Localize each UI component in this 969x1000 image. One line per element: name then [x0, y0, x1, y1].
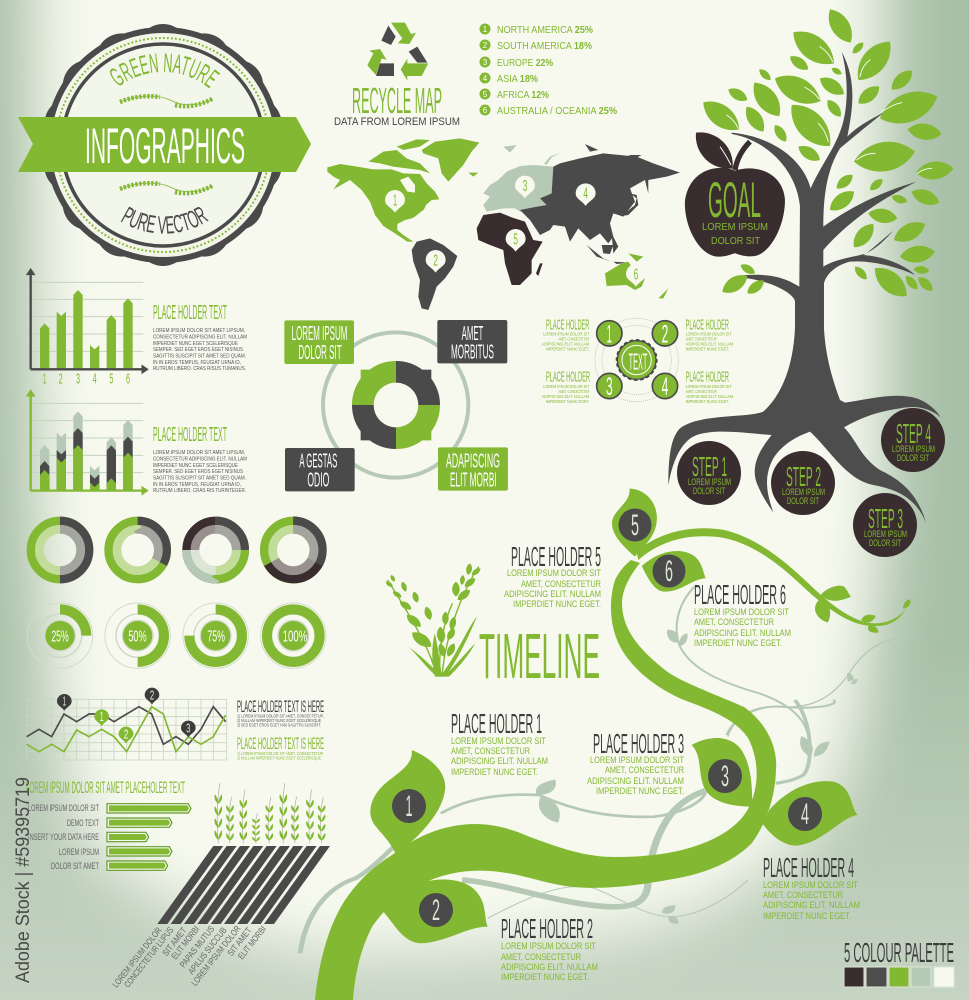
text block: place holder 2: LOREM IPSUM DOLOR SIT [501, 941, 596, 952]
text block: place holder 1: LOREM IPSUM DOLOR SIT [451, 736, 546, 747]
step 2: LOREM IPSUM [782, 487, 825, 497]
bar chart 1 [23, 270, 147, 388]
ornament: lower wheat [120, 183, 213, 193]
text: PLACE HOLDER TEXT IS HERE [237, 697, 324, 716]
progress ring row [27, 603, 326, 668]
text bottom right: LOREM IPSUM DOLOR SIT [686, 384, 732, 390]
marker dark 2: 2 [150, 687, 154, 702]
legend: regions: 3 [483, 58, 488, 67]
marker green 2: 2 [124, 726, 128, 741]
text: pure vector: PURE VECTOR [120, 206, 209, 234]
progress 25% [27, 603, 93, 668]
legend: regions: 1 [483, 25, 488, 34]
text block: bar chart 2 [153, 424, 247, 494]
marker dark 1 [57, 694, 72, 711]
label: adapiscing: ADAPISCING [446, 451, 500, 473]
leaf veins [727, 47, 932, 173]
wheat plants [215, 783, 325, 843]
bar 5 [107, 861, 168, 870]
legend: regions: EUROPE 22% [497, 58, 553, 69]
bar chart 1: 6 [126, 371, 130, 388]
text block: bar chart 1: SEMPER. SED EGET EROS EGET NISINUS [153, 347, 243, 353]
diagonal labels: LOREM IPSUM DOLOR [189, 923, 243, 988]
step 1: LOREM IPSUM [688, 477, 731, 487]
step 4: DOLOR SIT [897, 453, 929, 463]
text block: bar chart 1 [153, 302, 247, 372]
diagonal labels: PAPAS MUTUS [178, 924, 216, 970]
text top left: LOREM IPSUM DOLOR SIT [543, 332, 589, 338]
text: PLACE HOLDER [686, 370, 729, 386]
bar 4 [107, 847, 172, 856]
tree leaves [703, 9, 953, 296]
text block: bar chart 2: LOREM IPSUM DOLOR SIT AMET LIPSUM, [153, 450, 245, 456]
text block: place holder 5: ADIPISCING ELIT. NULLAM [504, 589, 601, 600]
step 2 [771, 451, 835, 515]
node 3 [597, 373, 622, 401]
pin 4: 4 [583, 186, 588, 203]
vine tendril with leaves [637, 528, 911, 633]
text bottom right [686, 370, 733, 405]
text block: line chart green: 1) LOREM IPSUM DOLOR SIT AMET, CONSECTETUR. [237, 751, 324, 756]
text top right: LOREM IPSUM DOLOR SIT [686, 332, 732, 338]
diagonal labels [110, 923, 268, 990]
donut 1 [31, 521, 89, 579]
pin 5: 5 [513, 231, 518, 248]
legend: regions: 6 [483, 106, 488, 115]
bar 3 [107, 832, 149, 842]
text bottom left: AMET, CONSECTETUR [558, 389, 590, 395]
text block: place holder 6 [694, 579, 791, 649]
text block: line chart green: 2) NULLAM IMPERDIET NUNC EGET SCELERISQUE. [237, 756, 322, 760]
step 3: LOREM IPSUM [864, 529, 907, 539]
watermark id: Adobe Stock | #59395719 [13, 777, 34, 983]
region: oceania [605, 253, 668, 298]
text bottom left: LOREM IPSUM DOLOR SIT [543, 384, 589, 390]
node 1 [597, 321, 622, 348]
diagonal labels: SIT AMET [160, 925, 189, 958]
step 3: STEP 3 [868, 503, 903, 534]
leaf 6 [642, 551, 706, 592]
text: PLACE HOLDER 1 [451, 708, 542, 739]
text block: place holder 5: IMPERDIET NUNC EGET. [513, 599, 601, 610]
label: amet morbitus: MORBITUS [451, 341, 494, 363]
step 1 [677, 441, 741, 505]
text top right: AMET, CONSECTETUR [686, 337, 717, 343]
numbered circle diagram [542, 317, 733, 405]
text block: place holder 1 [451, 708, 548, 778]
text: RECYCLE MAP [352, 80, 442, 121]
center ring diagram [284, 320, 508, 492]
pale vines upper [667, 587, 917, 737]
label: adapiscing: ELIT MORBI [450, 470, 497, 492]
bar chart 1: 3 [76, 371, 80, 388]
donut 4 [264, 521, 322, 579]
step 1: DOLOR SIT [693, 486, 725, 496]
text block: place holder 3 [587, 728, 684, 797]
marker dark 1: 1 [62, 694, 66, 709]
text block: place holder 4: LOREM IPSUM DOLOR SIT [763, 880, 858, 891]
diagonal wheat chart [110, 783, 330, 990]
progress 25%: 25% [51, 628, 69, 645]
text: PLACE HOLDER 2 [501, 913, 593, 944]
text bottom left: ADIPISCING ELIT. NULLAM [542, 394, 589, 400]
progress 75%: 75% [207, 628, 225, 645]
leaf 2 [383, 880, 488, 943]
label: adapiscing [438, 447, 508, 492]
text: PLACE HOLDER TEXT IS HERE [237, 734, 324, 753]
text block: line chart dark: 1) LOREM IPSUM DOLOR SIT AMET, CONSECTETUR. [237, 714, 324, 718]
heading: green nature: GREEN NATURE [110, 53, 220, 88]
bar 1 [107, 804, 191, 813]
badge: infographics seal [18, 24, 311, 266]
text block: place holder 6: LOREM IPSUM DOLOR SIT [694, 607, 789, 618]
text block: place holder 2: ADIPISCING ELIT. NULLAM [501, 962, 598, 973]
node 2: 2 [662, 321, 668, 348]
colour palette [844, 937, 954, 987]
text bottom right: IMPERDIET NUNC EGET. [686, 399, 729, 405]
text block: bar chart 1: LOREM IPSUM DOLOR SIT AMET LIPSUM, [153, 328, 245, 334]
text block: bar chart 1: RUTRUM LIBERO. CRAS RISUS TUMANUS. [153, 366, 246, 372]
region: europe [483, 145, 561, 212]
tree: goal [685, 9, 953, 333]
text block: bar chart 1: SAGITTIS SUSCIPIT SIT AMET SED QUAM. [153, 354, 246, 360]
text block: bar chart 2: SAGITTIS SUSCIPIT SIT AMET SED QUAM. [153, 476, 246, 482]
apple text: goal [702, 172, 768, 247]
legend: regions: AUSTRALIA / OCEANIA 25% [497, 106, 617, 117]
legend: regions: ASIA 18% [497, 74, 538, 85]
node 3: 3 [606, 374, 613, 401]
bar chart 1: 5 [109, 371, 113, 388]
text top right: IMPERDIET NUNC EGET. [686, 347, 729, 353]
legend: regions: 4 [483, 74, 488, 83]
progress 50% [105, 603, 170, 668]
label: lorem ipsum [284, 320, 354, 364]
ribbon [18, 117, 311, 172]
legend: regions: NORTH AMERICA 25% [497, 25, 593, 36]
region: asia [520, 144, 680, 264]
text top left: AMET, CONSECTETUR [558, 337, 590, 343]
badge: infographics seal: INFOGRAPHICS [85, 118, 245, 174]
region: south america [412, 238, 457, 310]
apple text: goal: DOLOR SIT [711, 235, 761, 247]
gear donut [352, 361, 440, 449]
diagonal labels: SIT AMET [225, 925, 254, 958]
text block: place holder 6: AMET, CONSECTETUR [694, 617, 774, 628]
text block: place holder 3: IMPERDIET NUNC EGET. [596, 786, 684, 797]
bar 2 [107, 818, 172, 827]
text block: place holder 2: AMET, CONSECTETUR [501, 952, 581, 963]
text bottom left [542, 370, 590, 405]
bar chart 1: 2 [59, 371, 63, 388]
text block: place holder 4: ADIPISCING ELIT. NULLAM [763, 900, 860, 911]
text: PLACE HOLDER TEXT [153, 302, 227, 324]
text block: place holder 2 [501, 913, 598, 983]
text: TIMELINE [479, 620, 600, 692]
marker green 1 [94, 709, 109, 726]
text block: line chart dark: 2) NULLAM IMPERDIET NUNC EGET SCELERISQUE. [237, 718, 322, 723]
leaf 3 [692, 738, 752, 807]
diagonal labels: LOREM IPSUM DOLOR [110, 925, 164, 990]
horizontal bar chart: DOLOR SIT AMET [51, 861, 99, 871]
node 4 [652, 373, 678, 401]
text block: place holder 1: AMET, CONSECTETUR [451, 746, 530, 757]
node 4: 4 [662, 374, 668, 401]
apple [685, 132, 785, 257]
pin 6: 6 [634, 266, 638, 283]
line chart [27, 687, 227, 760]
text block: line chart dark: 3) SED EGET EROS EGET NISI SAGITTIS SUSCIPIT. [237, 722, 321, 728]
horizontal bar chart: LOREM IPSUM DOLOR SIT [28, 803, 99, 813]
icon: recycle [367, 23, 428, 81]
text block: bar chart 2: SEMPER. SED EGET EROS EGET NISINUS [153, 469, 243, 475]
leaf 5 [612, 488, 657, 557]
diagonal stripes [157, 846, 330, 924]
step 1: STEP 1 [692, 451, 727, 482]
text block: place holder 5 [504, 541, 601, 610]
legend: regions: AFRICA 12% [497, 90, 549, 101]
text block: place holder 6: IMPERDIET NUNC EGET. [694, 638, 782, 649]
progress 75% [183, 603, 248, 668]
legend: regions: 2 [483, 41, 488, 50]
text bottom left: IMPERDIET NUNC EGET. [546, 399, 589, 405]
text: LOREM IPSUM DOLOR SIT AMET PLACEHOLER TEXT [26, 778, 185, 797]
text block: place holder 1: IMPERDIET NUNC EGET. [451, 767, 538, 778]
step 3 [853, 493, 917, 557]
text bottom right: AMET, CONSECTETUR [686, 389, 717, 395]
text block: place holder 6: ADIPISCING ELIT. NULLAM [694, 628, 791, 639]
text block: line chart green [237, 734, 324, 760]
marker dark 2 [145, 687, 159, 704]
progress 100%: 100% [283, 628, 307, 645]
text block: place holder 5: AMET, CONSECTETUR [521, 579, 601, 590]
text block: bar chart 1: IMPERDIET NUNC EGET SCELERISQUE [153, 341, 238, 347]
text block: place holder 4 [763, 852, 860, 922]
icon: timeline plant [386, 563, 480, 677]
text block: bar chart 2: IMPERDIET NUNC EGET SCELERISQUE [153, 463, 238, 469]
leaf 2: 2 [432, 894, 440, 927]
horizontal bar chart: INSERT YOUR DATA HERE [28, 832, 99, 842]
text block: place holder 3: AMET, CONSECTETUR [605, 765, 684, 776]
timeline vine [315, 560, 776, 1000]
leaf 3: 3 [721, 760, 729, 793]
diagonal labels: ELIT MORBI [169, 924, 201, 961]
pin 6 [626, 264, 646, 287]
text block: place holder 3: ADIPISCING ELIT. NULLAM [587, 776, 684, 787]
label: lorem ipsum: DOLOR SIT [298, 342, 342, 364]
subheading: data source: DATA FROM LOREM IPSUM [334, 116, 460, 128]
diagonal labels: CONCECTETUR LUPUS [122, 925, 175, 990]
text: PLACE HOLDER 3 [593, 728, 684, 759]
leaf 6: 6 [665, 555, 673, 588]
text: PLACE HOLDER [686, 317, 729, 333]
label: a gestas: ODIO [307, 470, 329, 492]
horizontal bar chart: LOREM IPSUM [59, 847, 99, 857]
leaf 4 [763, 781, 858, 846]
diagonal labels: ELIT MORBI [236, 924, 268, 961]
node 1: 1 [607, 321, 612, 348]
bar chart 1: 1 [43, 371, 46, 388]
leaf 1: 1 [406, 790, 412, 823]
pin 2 [426, 250, 446, 273]
pin 4 [576, 183, 596, 206]
step 4: LOREM IPSUM [892, 444, 935, 454]
hudson bay [400, 177, 415, 193]
leaf 1 [370, 750, 445, 855]
tree trunk and branches [732, 52, 917, 333]
text: PLACE HOLDER 6 [694, 579, 786, 610]
text block: place holder 4: AMET, CONSECTETUR [763, 890, 843, 901]
text block: place holder 3: LOREM IPSUM DOLOR SIT [590, 755, 684, 766]
numbered circle diagram: PLACE HOLDER [546, 370, 590, 386]
center ring diagram: LOREM IPSUM [292, 323, 347, 345]
donut chart row [31, 521, 322, 579]
pin 2: 2 [433, 252, 438, 269]
label: a gestas: A GESTAS [299, 451, 337, 473]
leaf 5: 5 [631, 509, 639, 542]
leaf 4: 4 [801, 798, 809, 831]
text block: place holder 5: LOREM IPSUM DOLOR SIT [507, 568, 601, 579]
text: PLACE HOLDER 5 [511, 541, 601, 572]
text bottom right: ADIPISCING ELIT. NULLAM [686, 394, 733, 400]
step 3: DOLOR SIT [869, 538, 901, 548]
text: PLACE HOLDER TEXT [153, 424, 227, 446]
marker green 2 [119, 726, 133, 743]
numbered circle diagram: TEXT [629, 348, 647, 374]
ornament: upper wheat [120, 96, 213, 106]
bar chart 1: 4 [93, 371, 97, 388]
text block: bar chart 2: CONSECTETUR ADIPISCING ELIT. NULLAM [153, 456, 247, 462]
text block: place holder 2: IMPERDIET NUNC EGET. [501, 972, 589, 983]
pin 5 [506, 229, 526, 252]
text top left [542, 317, 590, 353]
text top right [686, 317, 733, 353]
apple text: goal: LOREM IPSUM [702, 221, 768, 233]
marker dark 3 [181, 720, 196, 737]
label: amet morbitus [437, 320, 507, 363]
numbered circle diagram: PLACE HOLDER [546, 317, 589, 333]
horizontal bar chart: DEMO TEXT [67, 818, 99, 828]
horizontal bar chart [26, 778, 191, 871]
diagonal labels: APILUS SUCCUB [186, 925, 229, 976]
label: a gestas [285, 448, 355, 492]
text block: place holder 4: IMPERDIET NUNC EGET. [763, 911, 851, 922]
pale vines lower [300, 700, 835, 953]
region: north america [327, 138, 479, 242]
text: GOAL [708, 172, 761, 228]
legend: regions: 5 [483, 90, 488, 99]
pin 3: 3 [523, 178, 527, 195]
pin 3 [515, 176, 535, 198]
text block: line chart dark [237, 697, 324, 728]
bar chart 2 [23, 391, 147, 493]
center text node [617, 340, 657, 380]
legend: regions: SOUTH AMERICA 18% [497, 41, 592, 52]
label: amet morbitus: AMET [462, 323, 483, 345]
tree roots [668, 328, 941, 523]
progress 100% [261, 603, 326, 668]
world map [327, 138, 680, 310]
marker green 1: 1 [100, 709, 103, 724]
marker dark 3: 3 [186, 720, 190, 735]
step 2: DOLOR SIT [787, 496, 819, 506]
donut 2 [109, 521, 167, 579]
legend: regions [480, 24, 617, 117]
donut 3 [187, 521, 245, 579]
node 2 [652, 321, 678, 348]
step 2: STEP 2 [786, 461, 821, 492]
pin 1: 1 [393, 192, 397, 209]
text block: place holder 1: ADIPISCING ELIT. NULLAM [451, 756, 548, 767]
progress 50%: 50% [128, 628, 147, 645]
text block: bar chart 1: IN IN EROS TEMPUS, FEUGIAT URNA ID, [153, 360, 241, 366]
pin 1 [385, 190, 405, 213]
step 4 [881, 408, 945, 472]
text top left: ADIPISCING ELIT. NULLAM [542, 342, 589, 348]
text block: bar chart 2: RUTRUM LIBERO. CRAS RIS TURINTEGER. [153, 488, 246, 494]
text block: bar chart 1: CONSECTETUR ADIPISCING ELIT. NULLAM [153, 334, 247, 340]
text block: bar chart 2: IN IN EROS TEMPUS, FEUGIAT URNA ID, [153, 482, 241, 488]
text top right: ADIPISCING ELIT. NULLAM [686, 342, 733, 348]
text top left: IMPERDIET NUNC EGET. [546, 347, 589, 353]
region: africa [477, 213, 543, 285]
